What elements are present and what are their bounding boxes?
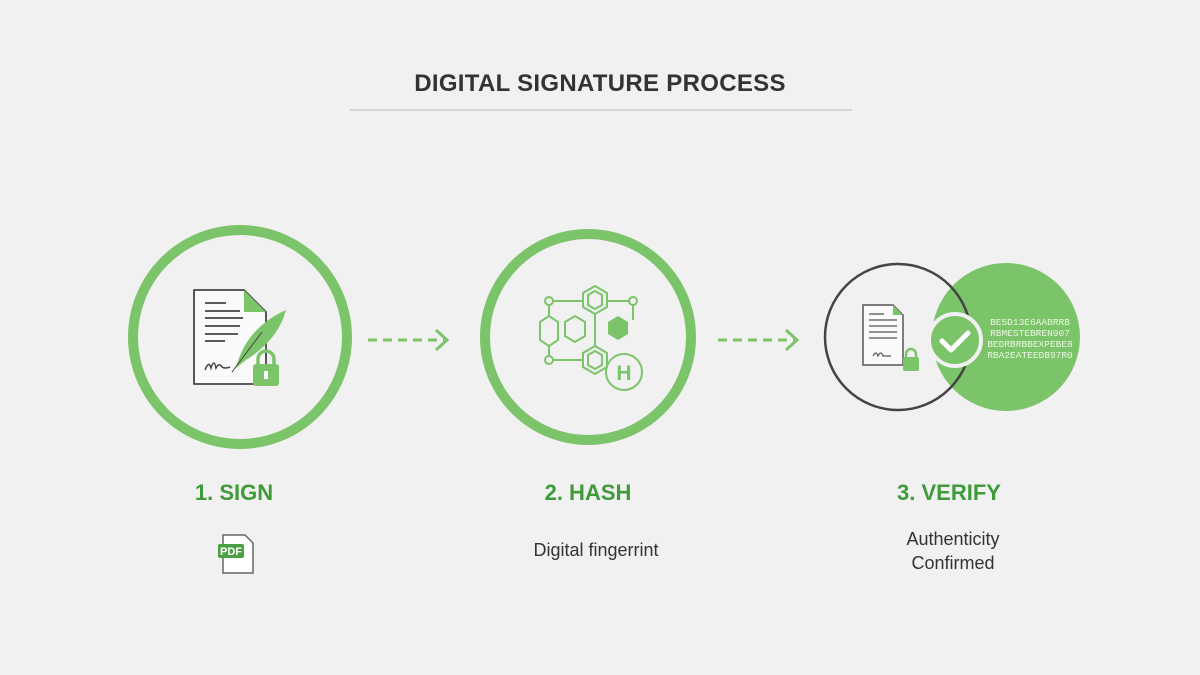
arrow 1 bbox=[368, 330, 447, 350]
hash text: BE5D13E6AABRRB bbox=[990, 317, 1070, 328]
label: hash: 2. HASH bbox=[545, 480, 631, 505]
hash text: RBA2EATEEDB97R0 bbox=[987, 350, 1073, 361]
arrow 2 bbox=[718, 330, 797, 350]
label: verify: 3. VERIFY bbox=[897, 480, 1001, 505]
text: authenticity: Confirmed bbox=[911, 553, 995, 573]
text: authenticity: Authenticity bbox=[906, 529, 1000, 549]
label: sign: 1. SIGN bbox=[195, 480, 273, 505]
step 2 circle bbox=[485, 234, 691, 440]
text: authenticity bbox=[906, 529, 1000, 573]
icon: pdf bbox=[218, 534, 254, 574]
icon: document with quill and lock bbox=[194, 290, 286, 386]
text: fingerprint: Digital fingerrint bbox=[533, 540, 659, 560]
icon: small document bbox=[863, 305, 919, 371]
hash text: RBMESTEBREN907 bbox=[990, 328, 1070, 339]
icon: check bbox=[929, 314, 981, 366]
hash text: BEDRBRBBEXPEBE8 bbox=[987, 339, 1073, 350]
title: DIGITAL SIGNATURE PROCESS bbox=[414, 70, 786, 97]
step 3 verify bbox=[825, 263, 1080, 411]
icon: pdf: PDF bbox=[220, 546, 242, 558]
icon: hash network bbox=[540, 286, 642, 390]
step 2 circle: H bbox=[616, 362, 632, 385]
step 1 circle bbox=[133, 230, 347, 444]
hash text bbox=[987, 317, 1073, 361]
